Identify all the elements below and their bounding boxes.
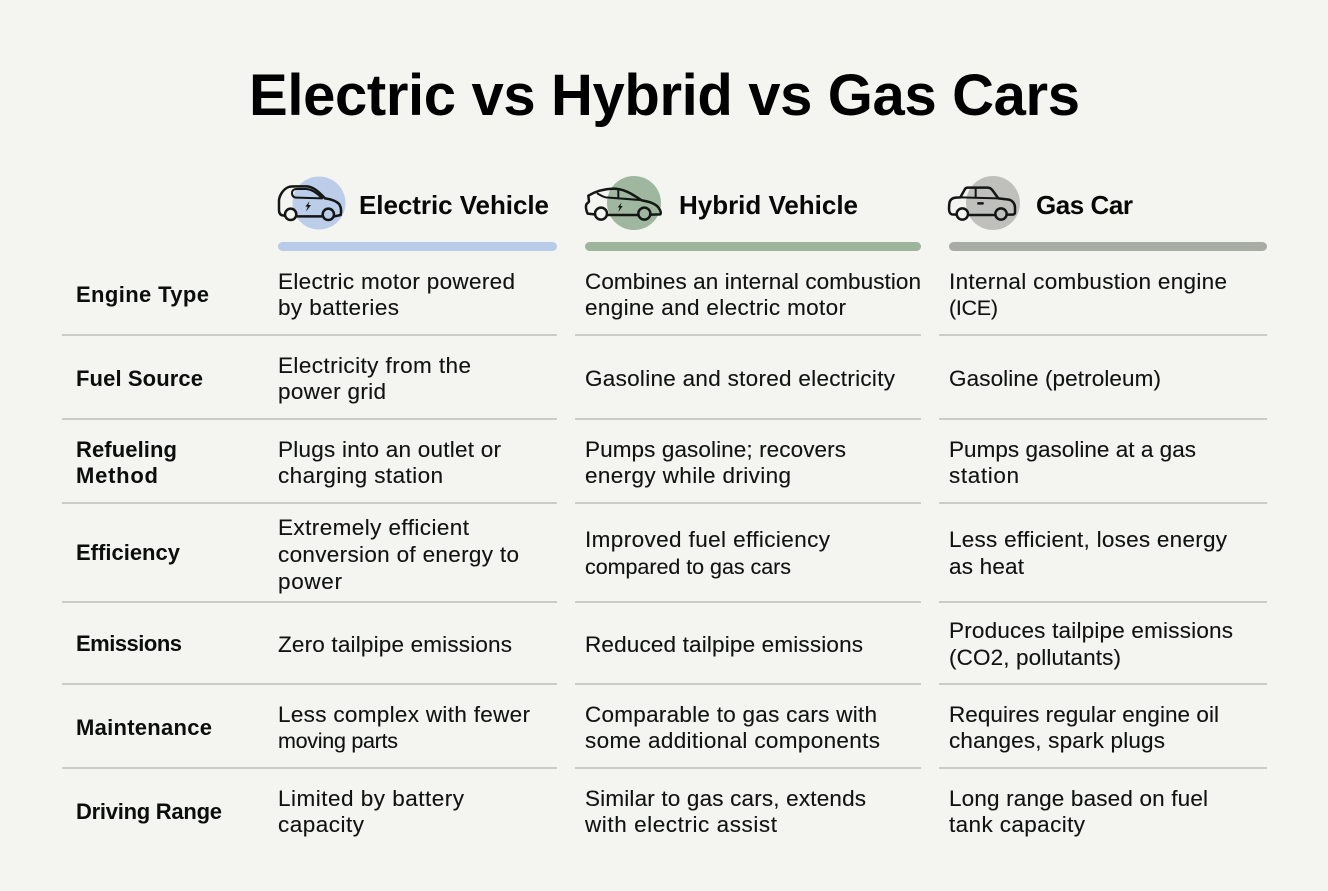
cell: hybrid driving range: Similar to gas cars, extends	[585, 786, 866, 811]
cell: hybrid engine type: engine and electric motor	[585, 295, 846, 320]
color bar: electric vehicle	[278, 242, 557, 251]
cell: electric efficiency: conversion of energy to	[278, 542, 519, 567]
cell: electric efficiency	[278, 515, 519, 594]
cell: gas maintenance	[949, 702, 1219, 753]
row: efficiency	[76, 515, 1228, 594]
cell: gas driving range	[949, 786, 1208, 837]
heading: hybrid vehicle: Hybrid Vehicle	[679, 190, 858, 220]
cell: electric engine type: by batteries	[278, 295, 399, 320]
cell: electric refueling	[278, 437, 502, 488]
row label: engine type: Engine Type	[76, 282, 209, 307]
column header: electric vehicle	[278, 176, 557, 251]
cell: gas maintenance: Requires regular engine oil	[949, 702, 1219, 727]
cell: electric engine type	[278, 269, 515, 320]
row label: refueling method: Refueling	[76, 437, 177, 462]
cell: electric refueling: Plugs into an outlet or	[278, 437, 502, 462]
row label: efficiency: Efficiency	[76, 540, 181, 565]
cell: electric emissions: Zero tailpipe emissions	[278, 632, 512, 657]
cell: gas engine type: (ICE)	[949, 296, 998, 320]
column header: hybrid vehicle	[585, 176, 921, 251]
row: maintenance	[76, 702, 1219, 753]
cell: gas refueling: Pumps gasoline at a gas	[949, 437, 1196, 462]
cell: hybrid emissions: Reduced tailpipe emissions	[585, 632, 863, 657]
icon: electric car	[279, 176, 346, 230]
cell: electric refueling: charging station	[278, 463, 443, 488]
cell: electric efficiency: power	[278, 569, 342, 594]
cell: gas emissions: Produces tailpipe emissions	[949, 618, 1233, 643]
color bar: hybrid vehicle	[585, 242, 921, 251]
row: refueling method	[76, 437, 1196, 488]
cell: electric driving range: capacity	[278, 812, 365, 837]
cell: hybrid refueling	[585, 437, 846, 488]
cell: gas efficiency: as heat	[949, 554, 1025, 579]
cell: electric fuel source: Electricity from the	[278, 353, 471, 378]
row: engine type	[76, 269, 1227, 320]
cell: hybrid engine type	[585, 269, 921, 320]
cell: hybrid maintenance	[585, 702, 880, 753]
row: emissions	[76, 618, 1233, 670]
cell: gas engine type: Internal combustion engine	[949, 269, 1227, 294]
cell: hybrid efficiency: compared to gas cars	[585, 555, 791, 579]
cell: electric engine type: Electric motor powered	[278, 269, 515, 294]
cell: gas efficiency	[949, 527, 1228, 579]
heading: electric vehicle: Electric Vehicle	[359, 190, 549, 220]
cell: gas fuel source: Gasoline (petroleum)	[949, 366, 1161, 391]
cell: hybrid refueling: Pumps gasoline; recovers	[585, 437, 846, 462]
cell: gas refueling: station	[949, 463, 1019, 488]
cell: gas maintenance: changes, spark plugs	[949, 728, 1165, 753]
cell: electric efficiency: Extremely efficient	[278, 515, 470, 540]
icon: hybrid car	[586, 176, 661, 230]
cell: hybrid engine type: Combines an internal combustion	[585, 269, 921, 294]
cell: electric driving range	[278, 786, 465, 837]
heading: gas car: Gas Car	[1036, 190, 1133, 220]
cell: hybrid efficiency	[585, 527, 831, 579]
cell: gas efficiency: Less efficient, loses energy	[949, 527, 1228, 552]
row label: driving range: Driving Range	[76, 799, 222, 824]
cell: electric driving range: Limited by battery	[278, 786, 465, 811]
cell: electric maintenance: moving parts	[278, 729, 398, 753]
cell: gas driving range: tank capacity	[949, 812, 1086, 837]
cell: electric fuel source: power grid	[278, 379, 386, 404]
cell: hybrid refueling: energy while driving	[585, 463, 791, 488]
row label: refueling method	[76, 437, 177, 488]
cell: hybrid efficiency: Improved fuel efficiency	[585, 527, 831, 552]
row: fuel source	[76, 353, 1161, 404]
cell: hybrid maintenance: some additional components	[585, 728, 880, 753]
row label: refueling method: Method	[76, 463, 158, 488]
cell: gas emissions: (CO2, pollutants)	[949, 645, 1121, 670]
row label: maintenance: Maintenance	[76, 715, 212, 740]
cell: gas driving range: Long range based on fuel	[949, 786, 1208, 811]
row label: fuel source: Fuel Source	[76, 366, 203, 391]
cell: gas emissions	[949, 618, 1233, 670]
cell: gas refueling	[949, 437, 1196, 488]
row: driving range	[76, 786, 1208, 837]
color bar: gas car	[949, 242, 1267, 251]
title: Electric vs Hybrid vs Gas Cars	[249, 63, 1080, 128]
cell: hybrid fuel source: Gasoline and stored electricity	[585, 366, 896, 391]
cell: electric maintenance: Less complex with fewer	[278, 702, 530, 727]
cell: electric maintenance	[278, 702, 530, 753]
cell: hybrid driving range	[584, 786, 866, 837]
cell: gas engine type	[949, 269, 1227, 320]
cell: electric fuel source	[278, 353, 471, 404]
cell: hybrid maintenance: Comparable to gas cars with	[585, 702, 877, 727]
icon: gas car	[949, 176, 1020, 230]
cell: hybrid driving range: with electric assist	[584, 812, 778, 837]
row label: emissions: Emissions	[76, 631, 182, 656]
column header: gas car	[949, 176, 1267, 251]
